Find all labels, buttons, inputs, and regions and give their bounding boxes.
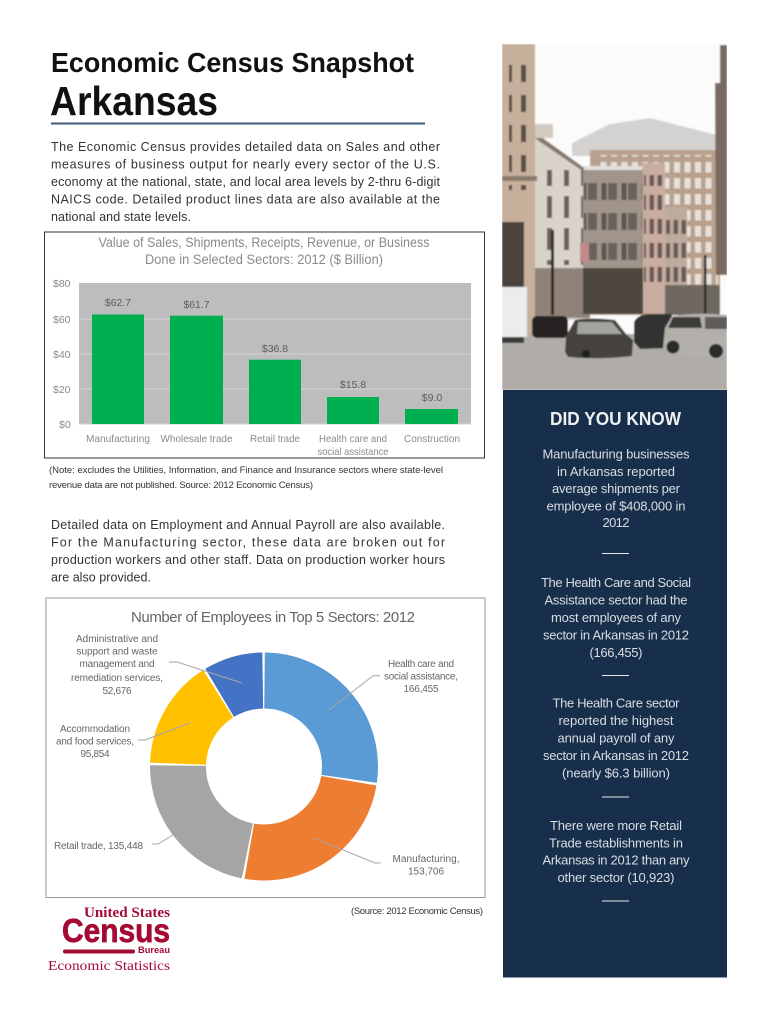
logo: Census Bureau: Economic Statistics	[48, 959, 170, 974]
narrow buildings	[643, 163, 665, 313]
bar value labels: $61.7	[183, 299, 210, 311]
fact: retail establishments: There were more Retail	[550, 818, 682, 833]
intro paragraph: measures of business output for nearly every sector of the U.S.	[51, 158, 440, 172]
label: health care: 166,455	[404, 684, 439, 695]
street	[502, 334, 727, 390]
fact: payroll: reported the highest	[558, 713, 674, 728]
employment paragraph	[51, 518, 445, 584]
flag	[580, 243, 589, 262]
bar chart note: revenue data are not published. Source: 2012 Economic Census)	[49, 480, 313, 491]
white building	[533, 133, 590, 320]
logo: Census Bureau	[48, 905, 170, 974]
employment paragraph: are also provided.	[51, 570, 151, 584]
label: administrative	[71, 634, 163, 697]
label: retail: Retail trade, 135,448	[54, 841, 143, 852]
fact: payroll	[543, 696, 689, 780]
right tower	[715, 45, 727, 275]
donut chart title: Number of Employees in Top 5 Sectors: 2012	[131, 609, 415, 626]
fact: shipments: in Arkansas reported	[557, 464, 675, 479]
bar chart title	[98, 235, 430, 267]
y axis labels: $20	[53, 384, 71, 396]
logo: Census Bureau: Census	[62, 912, 170, 949]
center car	[565, 318, 633, 358]
left building	[502, 44, 535, 334]
category labels: Wholesale trade	[160, 433, 233, 445]
bar value labels: $62.7	[105, 297, 131, 309]
y axis labels: $60	[53, 314, 71, 326]
label: accommodation: and food services,	[56, 736, 134, 748]
category labels	[86, 433, 460, 458]
label: manufacturing: Manufacturing,	[392, 854, 460, 865]
bar value labels	[105, 297, 442, 404]
fact: payroll: (nearly $6.3 billion)	[562, 766, 670, 780]
label: manufacturing: 153,706	[408, 866, 444, 878]
title: Economic Census Snapshot	[51, 47, 414, 78]
logo: Census Bureau: Bureau	[138, 945, 170, 956]
label: accommodation: 95,854	[80, 749, 110, 760]
label: administrative: management and	[80, 659, 154, 670]
y axis labels: $0	[59, 419, 71, 431]
center building	[583, 169, 643, 314]
bar chart title: Done in Selected Sectors: 2012 ($ Billion)	[145, 252, 383, 267]
panel: donut chart of employees	[46, 598, 485, 898]
state heading: Arkansas	[50, 78, 218, 124]
category labels: Manufacturing	[86, 433, 150, 445]
label: accommodation: Accommodation	[60, 724, 130, 735]
fact: employees: Assistance sector had the	[544, 592, 688, 608]
fact: employees: most employees of any	[551, 610, 682, 625]
fact: shipments	[542, 446, 690, 530]
fact: employees: sector in Arkansas in 2012	[543, 628, 689, 642]
donut rings	[146, 649, 382, 884]
fact: employees: (166,455)	[590, 645, 642, 660]
employment paragraph: For the Manufacturing sector, these data are broken out for	[51, 536, 445, 550]
plot area	[79, 283, 471, 424]
dark car behind	[634, 314, 672, 349]
label: administrative: Administrative and	[76, 634, 158, 645]
label: administrative: support and waste	[76, 646, 158, 658]
fact: shipments: employee of $408,000 in	[546, 498, 686, 514]
bar value labels: $15.8	[340, 379, 366, 391]
panel: bar chart of sales by sector	[44, 232, 484, 458]
fact: retail establishments	[542, 818, 690, 885]
label: health care	[384, 659, 458, 695]
fact: shipments: Manufacturing businesses	[542, 446, 690, 462]
panel: did you know sidebar	[503, 390, 727, 978]
fact: shipments: average shipments per	[552, 481, 681, 496]
bar chart note	[49, 465, 443, 491]
white truck	[502, 287, 527, 337]
employment paragraph: Detailed data on Employment and Annual Payroll are also available.	[51, 518, 445, 532]
label: accommodation	[56, 724, 134, 760]
label: health care: social assistance,	[384, 672, 458, 682]
category labels: Health care and	[319, 433, 387, 445]
parked dark car	[532, 316, 568, 338]
leader lines	[138, 662, 381, 863]
back building	[572, 118, 717, 156]
fact: payroll: annual payroll of any	[558, 730, 675, 746]
label: manufacturing	[392, 854, 460, 878]
fact: retail establishments: Arkansas in 2012 than any	[542, 852, 690, 868]
sidebar heading: DID YOU KNOW	[550, 409, 681, 429]
intro paragraph	[51, 140, 441, 224]
bar chart note: (Note: excludes the Utilities, Information, and Finance and Insurance sectors where state-level	[49, 465, 443, 476]
silver van	[663, 314, 727, 358]
category labels: Construction	[404, 433, 460, 445]
bars	[92, 314, 458, 424]
y axis labels: $80	[53, 278, 71, 290]
fact: retail establishments: Trade establishments in	[549, 836, 683, 850]
employment paragraph: production workers and other staff. Data on production worker hours	[51, 553, 445, 567]
intro paragraph: economy at the national, state, and local area levels by 2-thru 6-digit	[51, 175, 441, 189]
bar value labels: $36.8	[262, 343, 288, 355]
logo: Census Bureau: United States	[84, 905, 170, 921]
fact: payroll: The Health Care sector	[552, 696, 680, 710]
intro paragraph: The Economic Census provides detailed data on Sales and other	[51, 140, 440, 154]
label: health care: Health care and	[388, 659, 454, 670]
label: administrative: 52,676	[102, 686, 132, 697]
intro paragraph: NAICS code. Detailed product lines data are also available at the	[51, 192, 440, 206]
bar value labels: $9.0	[422, 392, 442, 404]
donut chart source: (Source: 2012 Economic Census)	[351, 906, 483, 917]
y axis labels: $40	[53, 349, 71, 361]
category labels: social assistance	[318, 446, 389, 458]
intro paragraph: national and state levels.	[51, 210, 191, 224]
fact: retail establishments: other sector (10,923)	[558, 870, 674, 885]
fact: employees: The Health Care and Social	[541, 575, 691, 590]
street lamps	[551, 230, 554, 315]
fact: employees	[541, 575, 691, 660]
y axis labels	[53, 278, 71, 431]
fact: payroll: sector in Arkansas in 2012	[543, 748, 689, 763]
bar chart title: Value of Sales, Shipments, Receipts, Revenue, or Business	[98, 235, 430, 250]
photo: city street	[502, 44, 727, 390]
category labels: Retail trade	[250, 433, 300, 445]
label: administrative: remediation services,	[71, 673, 163, 684]
fact: shipments: 2012	[602, 515, 630, 530]
